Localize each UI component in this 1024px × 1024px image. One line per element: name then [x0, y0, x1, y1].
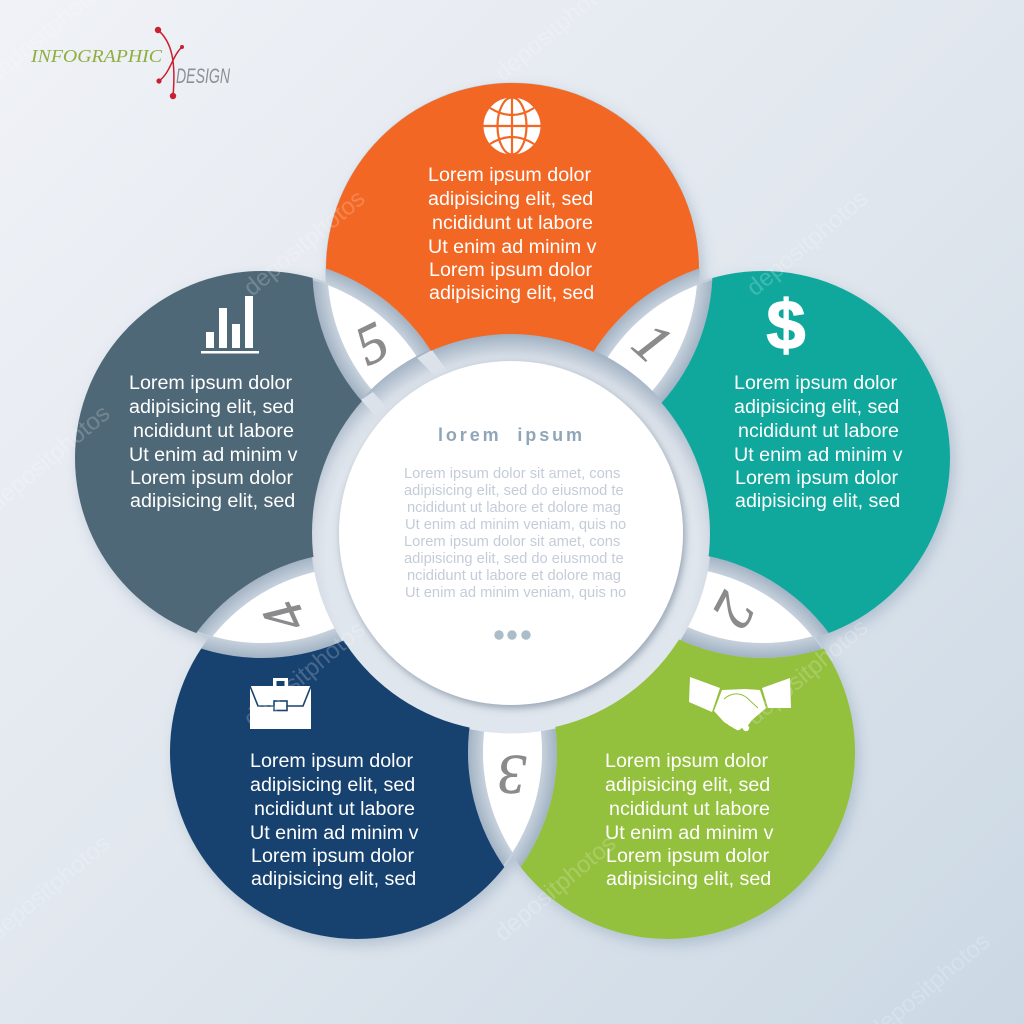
logo mark: red curves: [155, 27, 184, 99]
centre paragraph: Lorem ipsum dolor sit amet, cons: [404, 534, 620, 550]
grey bevel bands between petals: [78, 82, 878, 939]
panel: slate petal: [75, 271, 362, 633]
centre panel: [339, 361, 683, 705]
watermark text: depositphotos: [742, 614, 873, 731]
watermark text: depositphotos: [492, 416, 623, 533]
slate text: adipisicing elit, sed: [129, 396, 294, 418]
numbered lens 2: [688, 572, 812, 643]
orange text: Lorem ipsum dolor: [429, 259, 592, 281]
slate text: ncididunt ut labore: [133, 420, 294, 442]
watermark text: depositphotos: [490, 830, 621, 947]
orange text: [428, 164, 597, 304]
centre paragraph: adipisicing elit, sed do eiusmod te: [404, 483, 624, 499]
navy text: Lorem ipsum dolor: [251, 845, 414, 867]
navy text: adipisicing elit, sed: [250, 774, 415, 796]
icon: handshake: [689, 677, 791, 731]
teal text: Lorem ipsum dolor: [734, 372, 897, 394]
slate text: adipisicing elit, sed: [130, 490, 295, 512]
green text: Lorem ipsum dolor: [605, 750, 768, 772]
navy text: [250, 750, 419, 890]
panel: orange petal: [326, 83, 699, 352]
green text: ncididunt ut labore: [609, 798, 770, 820]
centre ring: [310, 332, 712, 734]
centre paragraph: Lorem ipsum dolor sit amet, cons: [404, 466, 620, 482]
outer soft shadow of petals: [79, 88, 954, 945]
watermark text: depositphotos: [742, 185, 873, 302]
navy text: Ut enim ad minim v: [250, 822, 419, 844]
slate text: Lorem ipsum dolor: [130, 467, 293, 489]
watermark text: depositphotos: [239, 185, 370, 302]
numbered lens 5: [328, 285, 416, 389]
green text: Ut enim ad minim v: [605, 822, 774, 844]
numbered lens 3: [483, 731, 542, 852]
orange text: adipisicing elit, sed: [428, 188, 593, 210]
centre paragraph: ncididunt ut labore et dolore mag: [407, 568, 621, 584]
green text: adipisicing elit, sed: [606, 868, 771, 890]
numeral 4: 4: [251, 592, 319, 642]
panel: green petal: [520, 640, 855, 939]
logo word: design: DESIGN: [176, 65, 231, 88]
green text: Lorem ipsum dolor: [606, 845, 769, 867]
centre white disc: [339, 361, 683, 705]
centre heading: lorem ipsum: [438, 425, 586, 445]
teal text: Ut enim ad minim v: [734, 444, 903, 466]
numeral 1: 1: [621, 311, 683, 375]
slate text: Lorem ipsum dolor: [129, 372, 292, 394]
centre paragraph: Ut enim ad minim veniam, quis no: [405, 585, 626, 601]
numeral 2: 2: [700, 583, 768, 637]
orange text: Ut enim ad minim v: [428, 236, 597, 258]
watermark text: depositphotos: [239, 616, 370, 733]
icon: dollar: $: [767, 286, 805, 364]
teal text: ncididunt ut labore: [738, 420, 899, 442]
numeral 5: 5: [346, 310, 398, 378]
numbered lens 1: [608, 285, 697, 390]
light strips crossing the ring by lens 5: [361, 350, 448, 419]
logo: infographic design: [30, 27, 231, 99]
centre paragraph: Ut enim ad minim veniam, quis no: [405, 517, 626, 533]
panel: navy petal: [170, 640, 504, 939]
centre paragraph: [404, 466, 626, 601]
slate text: [129, 372, 298, 512]
navy text: adipisicing elit, sed: [251, 868, 416, 890]
orange text: adipisicing elit, sed: [429, 282, 594, 304]
teal text: Lorem ipsum dolor: [735, 467, 898, 489]
slate text: Ut enim ad minim v: [129, 444, 298, 466]
green text: [605, 750, 774, 890]
centre paragraph: adipisicing elit, sed do eiusmod te: [404, 551, 624, 567]
logo word: infographic: INFOGRAPHIC: [30, 46, 162, 66]
green text: adipisicing elit, sed: [605, 774, 770, 796]
navy text: ncididunt ut labore: [254, 798, 415, 820]
icon: bar chart: [201, 296, 259, 354]
teal text: [734, 372, 903, 512]
teal text: adipisicing elit, sed: [734, 396, 899, 418]
orange text: ncididunt ut labore: [432, 212, 593, 234]
centre dots: [494, 630, 531, 640]
centre paragraph: ncididunt ut labore et dolore mag: [407, 500, 621, 516]
navy text: Lorem ipsum dolor: [250, 750, 413, 772]
orange text: Lorem ipsum dolor: [428, 164, 591, 186]
teal text: adipisicing elit, sed: [735, 490, 900, 512]
icon: briefcase: [250, 678, 311, 729]
panel: teal petal: [662, 271, 950, 633]
numbered lens 4: [212, 572, 334, 643]
icon: globe: [484, 98, 540, 154]
numeral 3: 3: [498, 743, 527, 805]
